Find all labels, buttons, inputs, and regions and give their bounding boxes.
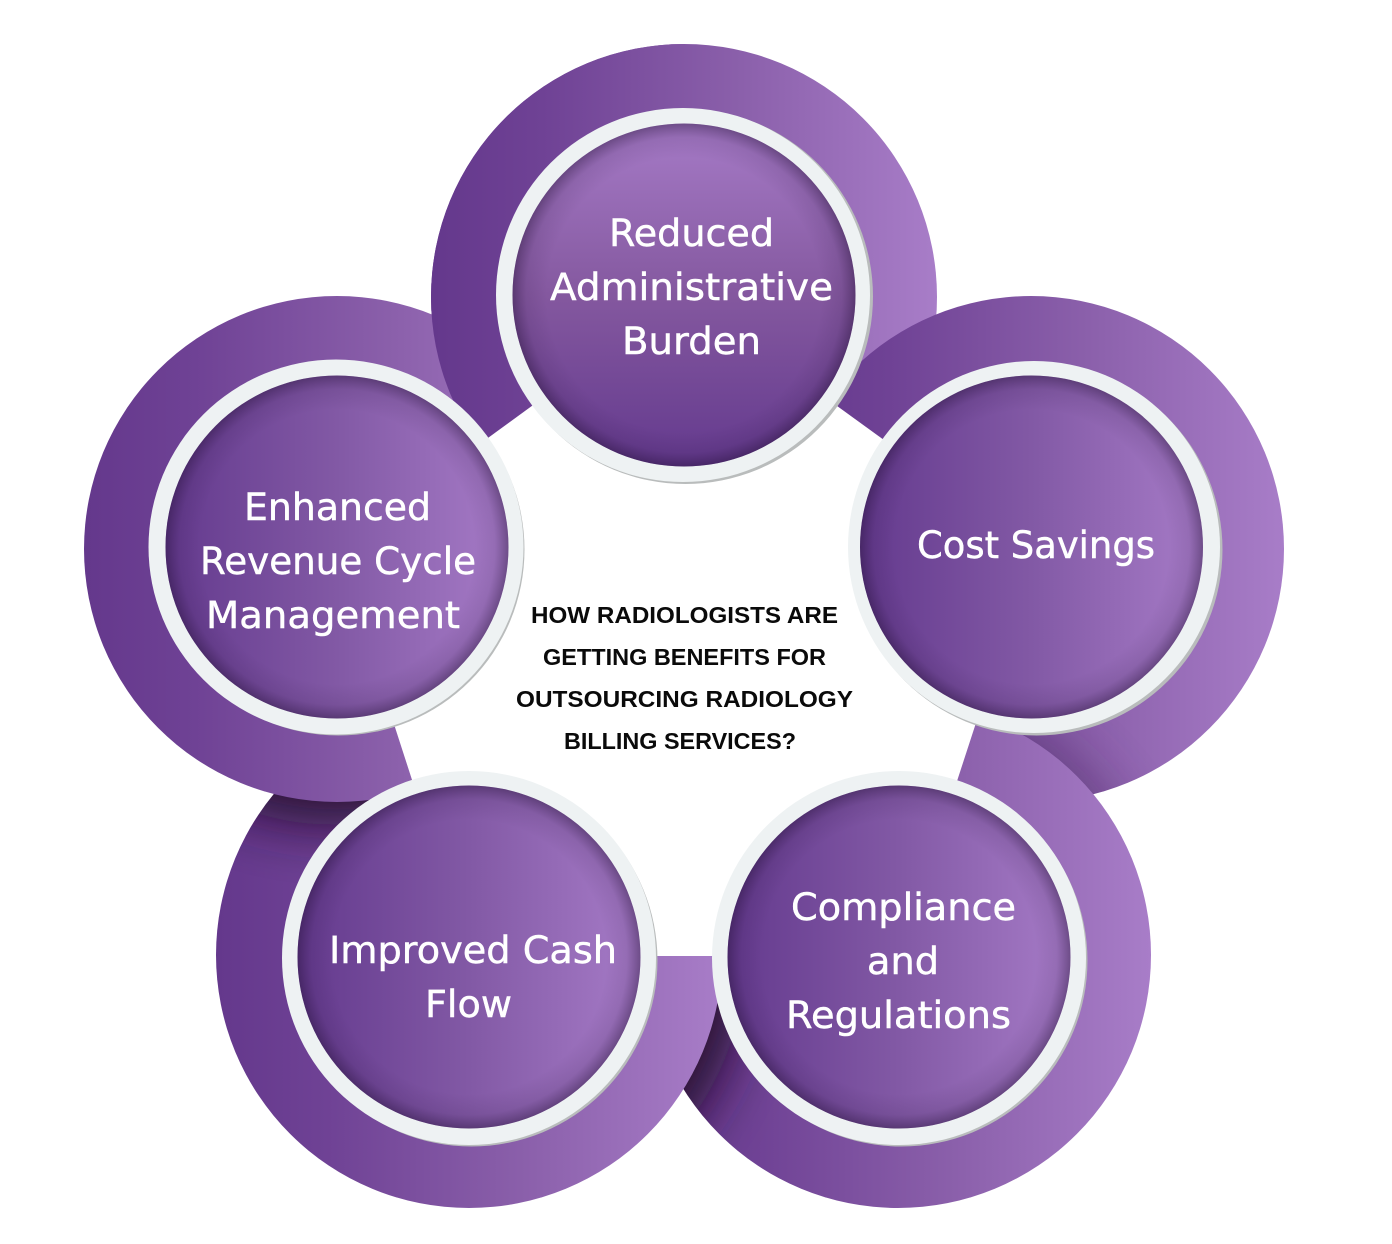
text: improved cash flow xyxy=(329,929,617,1026)
text: enhanced revenue cycle management: Enhanced xyxy=(244,486,431,529)
icon: inner disc right xyxy=(860,376,1203,718)
panel: compliance and regulations xyxy=(712,771,1088,1146)
text: compliance and regulations xyxy=(786,886,1016,1037)
text: compliance and regulations: Regulations xyxy=(786,994,1011,1037)
text: improved cash flow: Improved Cash xyxy=(329,929,617,972)
text: compliance and regulations: Compliance xyxy=(791,886,1016,929)
text: reduced administrative burden: Burden xyxy=(622,320,761,363)
text: enhanced revenue cycle management xyxy=(200,486,476,637)
text: enhanced revenue cycle management: Management xyxy=(206,594,460,637)
panel: enhanced revenue cycle management xyxy=(148,360,524,736)
title: center heading: GETTING BENEFITS FOR xyxy=(543,644,826,670)
title: center heading xyxy=(516,602,853,754)
text: reduced administrative burden xyxy=(550,212,833,363)
panel: improved cash flow xyxy=(282,771,658,1146)
icon: inner disc left xyxy=(166,376,508,718)
title: center heading: HOW RADIOLOGISTS ARE xyxy=(531,602,838,628)
icon: inner disc top xyxy=(512,124,856,466)
panel: reduced administrative burden xyxy=(496,108,873,484)
title: center heading: OUTSOURCING RADIOLOGY xyxy=(516,686,853,712)
text: compliance and regulations: and xyxy=(867,940,939,983)
title: center heading: BILLING SERVICES? xyxy=(564,728,796,754)
icon: inner disc lower left xyxy=(298,786,640,1128)
text: reduced administrative burden: Administrative xyxy=(550,266,833,309)
icon: inner disc lower right xyxy=(728,786,1070,1128)
text: cost savings: Cost Savings xyxy=(917,524,1155,567)
text: enhanced revenue cycle management: Revenue Cycle xyxy=(200,540,476,583)
text: reduced administrative burden: Reduced xyxy=(609,212,774,255)
panel: cost savings xyxy=(848,361,1222,736)
text: improved cash flow: Flow xyxy=(425,983,512,1026)
